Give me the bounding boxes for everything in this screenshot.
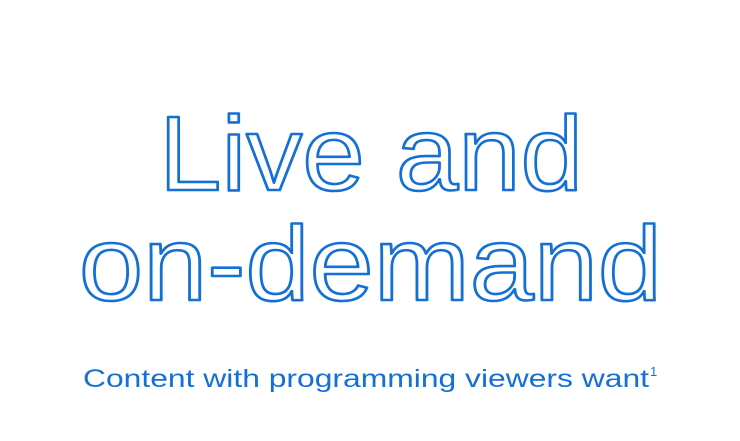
title: outlined headline <box>79 95 662 323</box>
title line 1: Live and <box>159 95 583 213</box>
footnote marker: 1 <box>650 364 657 379</box>
subtitle: Content with programming viewers want <box>83 365 649 393</box>
title line 2: on-demand <box>79 205 662 323</box>
